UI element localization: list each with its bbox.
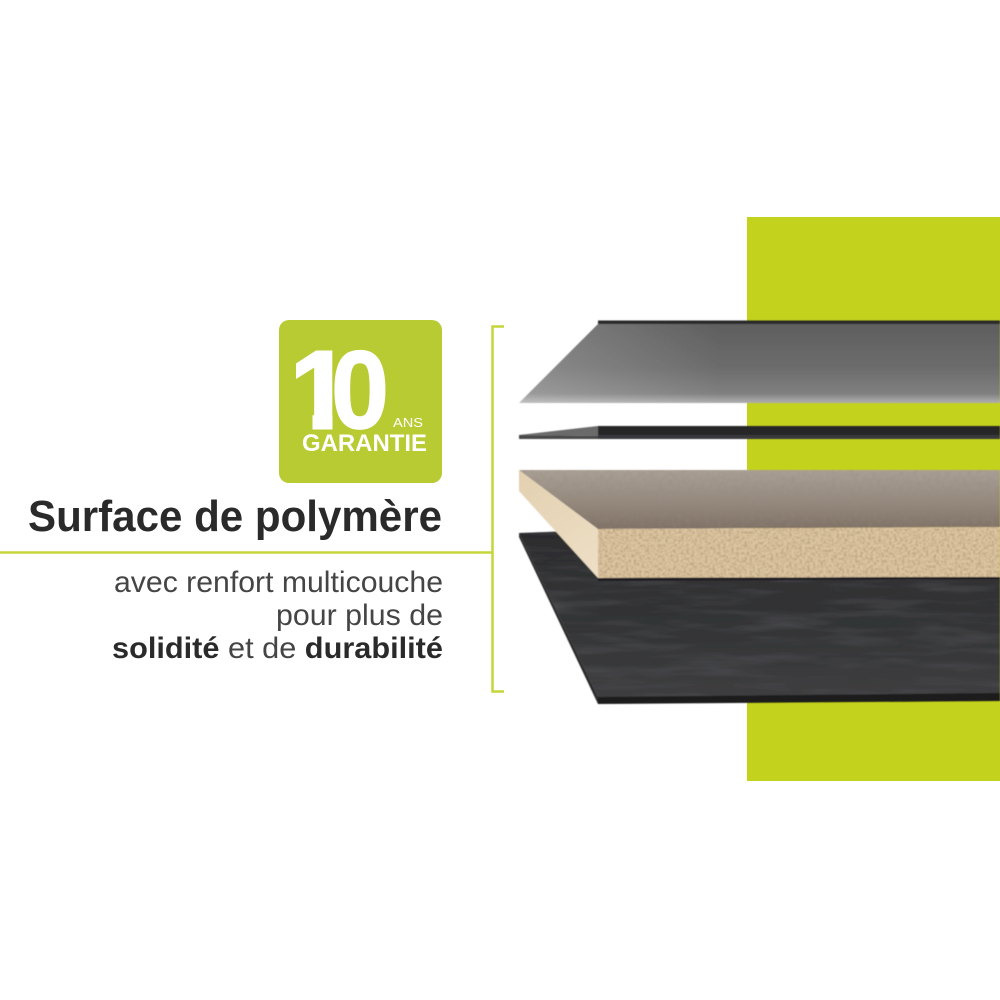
green connector line and bracket bbox=[0, 326, 504, 692]
description text: solidité et de durabilité bbox=[112, 632, 443, 665]
badge label ANS: ANS bbox=[393, 415, 423, 430]
description text: avec renfort multicouche bbox=[114, 566, 443, 599]
badge numeral 0: 0 bbox=[331, 329, 389, 452]
layer 1: polymer surface bbox=[519, 320, 1000, 403]
badge numeral 1: 1 bbox=[290, 329, 351, 452]
description text: pour plus de bbox=[276, 599, 443, 632]
description text bbox=[112, 566, 443, 665]
warranty badge bbox=[279, 320, 442, 483]
infographic canvas bbox=[0, 217, 1000, 781]
green background panel bbox=[747, 217, 1000, 781]
badge label GARANTIE: GARANTIE bbox=[302, 430, 427, 457]
layer 3: fibreboard core bbox=[519, 470, 1000, 581]
heading: Surface de polymère bbox=[28, 492, 442, 541]
layer 2: thin reinforcement sheet bbox=[519, 426, 1000, 439]
layered panel diagram bbox=[519, 320, 1000, 705]
layer 4: dark backing sheet bbox=[519, 530, 1000, 705]
